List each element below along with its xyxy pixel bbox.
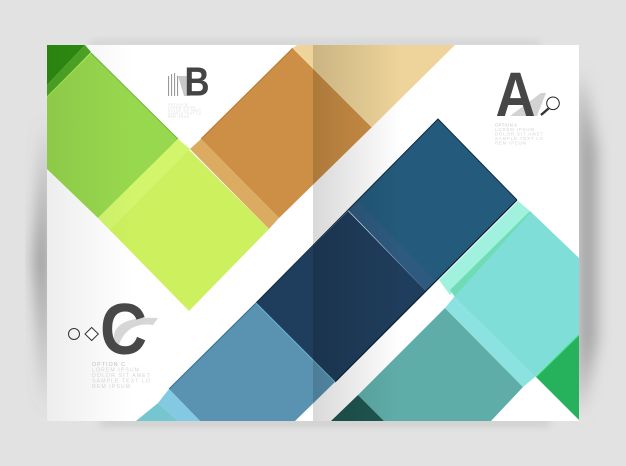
option C text: DOLOR SIT AMET bbox=[92, 373, 151, 379]
option B block bbox=[168, 59, 210, 118]
panel: green and lime squares bbox=[47, 45, 269, 311]
icon: circle bbox=[68, 328, 80, 340]
letter A: A bbox=[496, 60, 536, 130]
option C text bbox=[92, 362, 151, 390]
option C text: REM IPSUM bbox=[92, 384, 130, 390]
letter B: B bbox=[184, 59, 210, 105]
letter C: C bbox=[100, 290, 147, 370]
panel: orange and tan squares bbox=[190, 45, 455, 229]
icon: bars bbox=[168, 73, 190, 96]
icon: diamond bbox=[85, 328, 98, 340]
option B text: REM IPSUM bbox=[168, 114, 190, 118]
option C block bbox=[68, 290, 158, 390]
panel: blue squares bbox=[136, 119, 517, 421]
option B text: LOREM IPSUM bbox=[168, 106, 196, 110]
option C text: LOREM IPSUM bbox=[92, 368, 139, 374]
option A text bbox=[495, 122, 544, 146]
ghost shape behind A bbox=[510, 93, 546, 116]
option A block bbox=[495, 60, 559, 146]
panel: teal squares bbox=[331, 201, 579, 421]
option A text: OPTION A bbox=[495, 122, 517, 128]
spine and edge shading bbox=[47, 45, 401, 421]
icon: magnifier bbox=[541, 97, 559, 115]
brochure spread bbox=[47, 45, 579, 421]
ghost shape behind C bbox=[114, 318, 158, 348]
option A text: SAMPLE TEXT LO bbox=[495, 136, 544, 141]
option A text: REM IPSUM bbox=[495, 140, 526, 146]
option B text: SAMPLE TEXT LO bbox=[168, 112, 202, 116]
option B text bbox=[168, 102, 202, 118]
option B text: OPTION B bbox=[168, 102, 187, 106]
option C text: SAMPLE TEXT LO bbox=[92, 378, 150, 384]
option C text: OPTION C bbox=[92, 362, 125, 368]
option A text: LOREM IPSUM bbox=[495, 127, 534, 132]
option B text: DOLOR SIT AMET bbox=[168, 108, 201, 112]
option A text: DOLOR SIT AMET bbox=[495, 132, 543, 136]
